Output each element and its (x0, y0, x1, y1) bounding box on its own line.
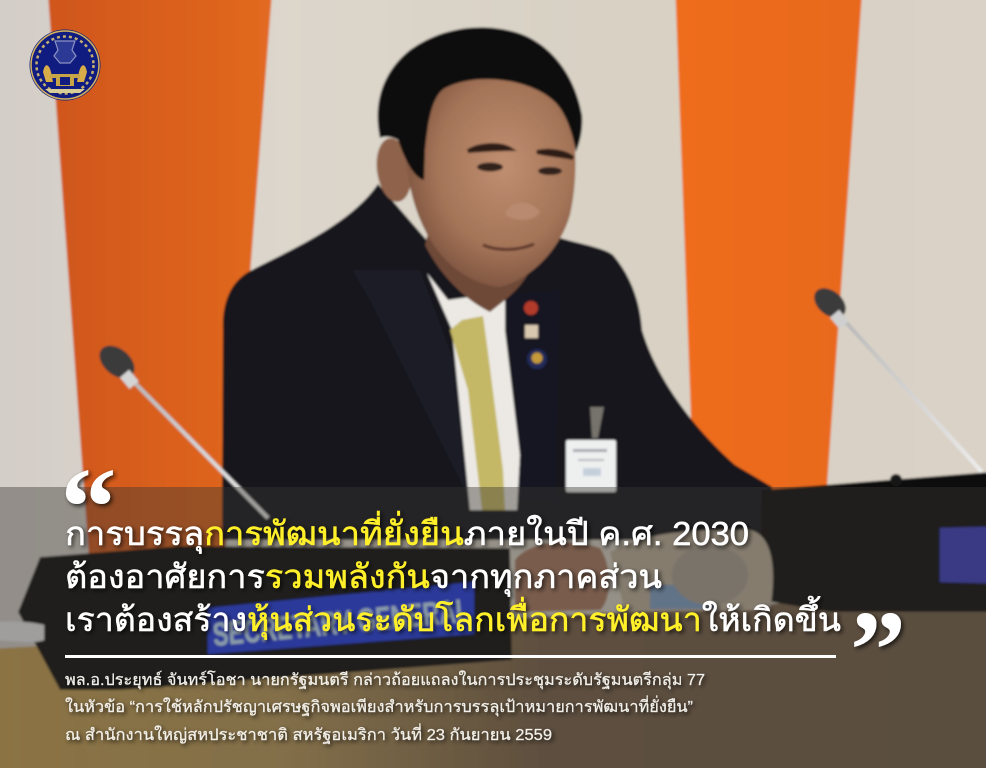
divider rule (65, 655, 836, 658)
desk surface (0, 590, 986, 768)
microphone right (808, 282, 982, 472)
console button (890, 474, 902, 486)
lapel shade left (352, 270, 505, 500)
attribution line 1: พล.อ.ประยุทธ์ จันทร์โอชา นายกรัฐมนตรี กล่าวถ้อยแถลงในการประชุมระดับรัฐมนตรีกลุ่ม 77 (65, 670, 705, 690)
quote line 2: ต้องอาศัยการรวมพลังกันจากทุกภาคส่วน (65, 558, 662, 597)
attribution text (65, 670, 705, 744)
opening quotation mark: “ (60, 446, 116, 570)
blue name plate (208, 582, 474, 654)
lapel shade right (505, 290, 560, 500)
ear (373, 136, 415, 204)
paper on the left (0, 622, 44, 642)
quote line 3: เราต้องสร้างหุ้นส่วนระดับโลกเพื่อการพัฒนา ให้เกิดขึ้น (65, 596, 841, 640)
attribution line 3: ณ สำนักงานใหญ่สหประชาชาติ สหรัฐอเมริกา วันที่ 23 กันยายน 2559 (65, 723, 552, 744)
console screen (940, 526, 986, 584)
hair (378, 27, 582, 180)
microphone left (93, 339, 268, 518)
logo: government seal (30, 30, 100, 100)
water bottle and papers (610, 530, 773, 612)
suit jacket (222, 184, 772, 540)
shirt (427, 273, 520, 510)
name plate text: SECRETARY GENERAL (211, 591, 471, 653)
quote text (65, 511, 841, 640)
hand (515, 542, 609, 612)
attribution line 2: ในหัวข้อ “การใช้หลักปรัชญาเศรษฐกิจพอเพียงสำหรับการบรรลุเป้าหมายการพัฒนาที่ยั่งยืน” (65, 695, 693, 717)
nose and mouth (483, 202, 540, 249)
left name plate stand (18, 546, 512, 690)
orange wall panel left (47, 0, 273, 600)
orange wall panel right (675, 0, 863, 500)
closing quotation mark: ” (850, 589, 906, 713)
neck (425, 225, 530, 312)
dark translucent band over the lower photo (0, 487, 986, 768)
quote line 1: การบรรลุการพัฒนาที่ยั่งยืน ภายในปี ค.ศ. 2030 (65, 511, 749, 554)
conference badge (566, 407, 616, 492)
lapel pins (524, 301, 547, 369)
right console (760, 470, 986, 612)
face (405, 77, 575, 287)
eyes and brows (468, 145, 573, 175)
necktie (450, 316, 505, 510)
